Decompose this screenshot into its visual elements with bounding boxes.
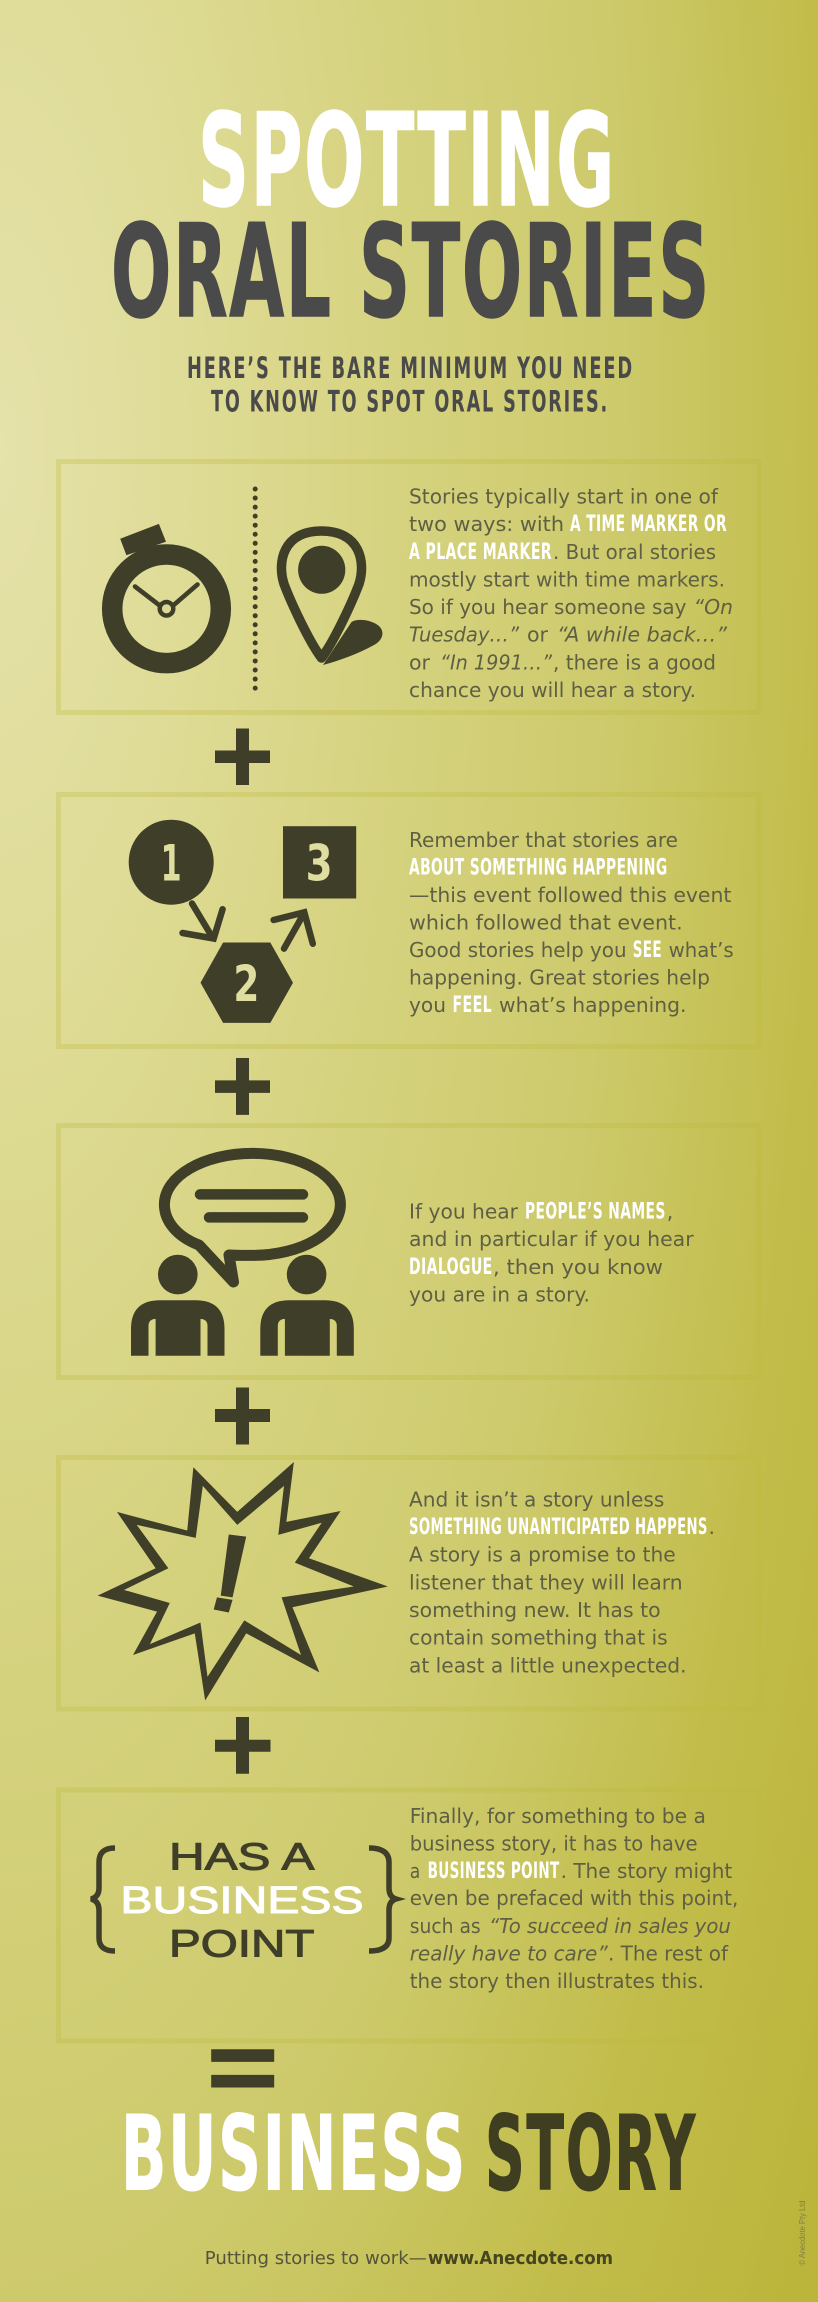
- text: business point: really have to care”: [410, 1942, 608, 1966]
- text: something unanticipated: [409, 1488, 715, 1677]
- text: something unanticipated: at least a little unexpected.: [409, 1653, 686, 1677]
- footer: [205, 2249, 613, 2269]
- text: something happening: [409, 828, 734, 1018]
- text: business point: “To succeed in sales you: [489, 1914, 731, 1938]
- text: names and dialogue: [409, 1199, 694, 1306]
- text: business point: BUSINESS POINT: [428, 1859, 560, 1884]
- text: names and dialogue: ,: [667, 1199, 673, 1223]
- plus sign: [215, 728, 270, 785]
- panel: business point: [58, 1790, 759, 2041]
- text: names and dialogue: and in particular if you hear: [409, 1227, 694, 1251]
- text: time marker: or: [527, 623, 549, 647]
- subtitle: [187, 351, 634, 418]
- footer: www.Anecdote.com: [428, 2249, 613, 2269]
- icon: sequence 1 2 3: [129, 820, 356, 1023]
- text: time marker: “On: [694, 595, 733, 619]
- icon: sequence 1 2 3: 1: [161, 834, 182, 892]
- text: time marker: Stories typically start in one of: [409, 485, 719, 509]
- footer: Putting stories to work—: [205, 2249, 427, 2269]
- text: something happening: FEEL: [452, 993, 492, 1018]
- text: something unanticipated: And it isn’t a story unless: [409, 1488, 664, 1512]
- text: business point: even be prefaced with this point,: [410, 1886, 738, 1910]
- panel: something happening: [58, 794, 759, 1046]
- text: something happening: what’s: [669, 938, 734, 962]
- text: something happening: —this event followed this event: [409, 883, 731, 907]
- icon: stopwatch: [112, 524, 221, 663]
- text: something happening: Good stories help you: [409, 938, 627, 962]
- dotted divider: [253, 489, 258, 696]
- icon: starburst with exclamation mark: [98, 1462, 388, 1701]
- graphic: has a business point: HAS A: [169, 1836, 316, 1878]
- text: something happening: which followed that event.: [409, 910, 683, 934]
- text: business point: business story, it has to have: [410, 1831, 698, 1855]
- text: business point: . The story might: [561, 1859, 732, 1883]
- text: something happening: ABOUT SOMETHING HAPPENING: [409, 855, 668, 880]
- graphic: has a business point: [91, 1836, 396, 1964]
- text: time marker: A TIME MARKER OR: [570, 512, 727, 537]
- text: time marker: , there is a good: [553, 650, 716, 674]
- text: time marker: So if you hear someone say: [409, 595, 686, 619]
- text: time marker: . But oral stories: [553, 540, 716, 564]
- text: business point: such as: [410, 1914, 481, 1938]
- panel: time or place marker: [58, 462, 759, 712]
- text: time marker: mostly start with time markers.: [409, 568, 725, 592]
- result: business story: BUSINESS: [121, 2094, 467, 2214]
- text: time marker: A PLACE MARKER: [409, 540, 552, 565]
- text: business point: Finally, for something to be a: [410, 1804, 706, 1828]
- text: business point: [410, 1804, 738, 1993]
- text: time marker: two ways: with: [409, 512, 564, 536]
- graphic: has a business point: BUSINESS: [120, 1879, 364, 1921]
- text: names and dialogue: , then you know: [493, 1255, 663, 1279]
- text: something happening: Remember that stories are: [409, 828, 678, 852]
- text: time marker: [409, 485, 733, 702]
- text: business point: a: [410, 1859, 420, 1883]
- text: something unanticipated: .: [708, 1515, 715, 1539]
- panel: something unanticipated: [58, 1458, 759, 1709]
- icon: sequence 1 2 3: 3: [306, 834, 333, 892]
- text: something happening: what’s happening.: [499, 993, 686, 1017]
- text: something unanticipated: listener that they will learn: [409, 1570, 683, 1594]
- plus sign: [215, 1058, 270, 1115]
- plus sign: [215, 1388, 270, 1444]
- text: business point: the story then illustrates this.: [410, 1969, 704, 1993]
- text: something unanticipated: contain something that is: [409, 1626, 668, 1650]
- icon: two people talking: [131, 1153, 354, 1356]
- text: something unanticipated: A story is a promise to the: [409, 1543, 676, 1567]
- equals sign: [211, 2049, 274, 2088]
- text: something happening: happening. Great stories help: [409, 966, 710, 990]
- icon: map pin: [281, 531, 382, 665]
- text: names and dialogue: DIALOGUE: [409, 1255, 493, 1280]
- text: names and dialogue: If you hear: [409, 1199, 519, 1223]
- text: business point: . The rest of: [608, 1942, 729, 1966]
- text: time marker: “In 1991…”: [440, 650, 552, 674]
- panel: names and dialogue: [58, 1126, 759, 1378]
- text: names and dialogue: PEOPLE’S NAMES: [525, 1199, 666, 1224]
- text: time marker: Tuesday…”: [409, 623, 519, 647]
- title: [111, 87, 711, 347]
- icon: sequence 1 2 3: 2: [233, 955, 259, 1013]
- text: something happening: SEE: [633, 938, 662, 963]
- text: time marker: “A while back…”: [557, 623, 727, 647]
- plus sign: [215, 1717, 270, 1774]
- graphic: has a business point: POINT: [169, 1922, 314, 1964]
- text: time marker: chance you will hear a story.: [409, 678, 696, 702]
- copyright: © Anecdote Pty Ltd: [798, 2200, 807, 2266]
- text: names and dialogue: you are in a story.: [409, 1282, 590, 1306]
- text: time marker: or: [409, 650, 431, 674]
- text: something unanticipated: something new. It has to: [409, 1598, 661, 1622]
- text: something happening: you: [409, 993, 446, 1017]
